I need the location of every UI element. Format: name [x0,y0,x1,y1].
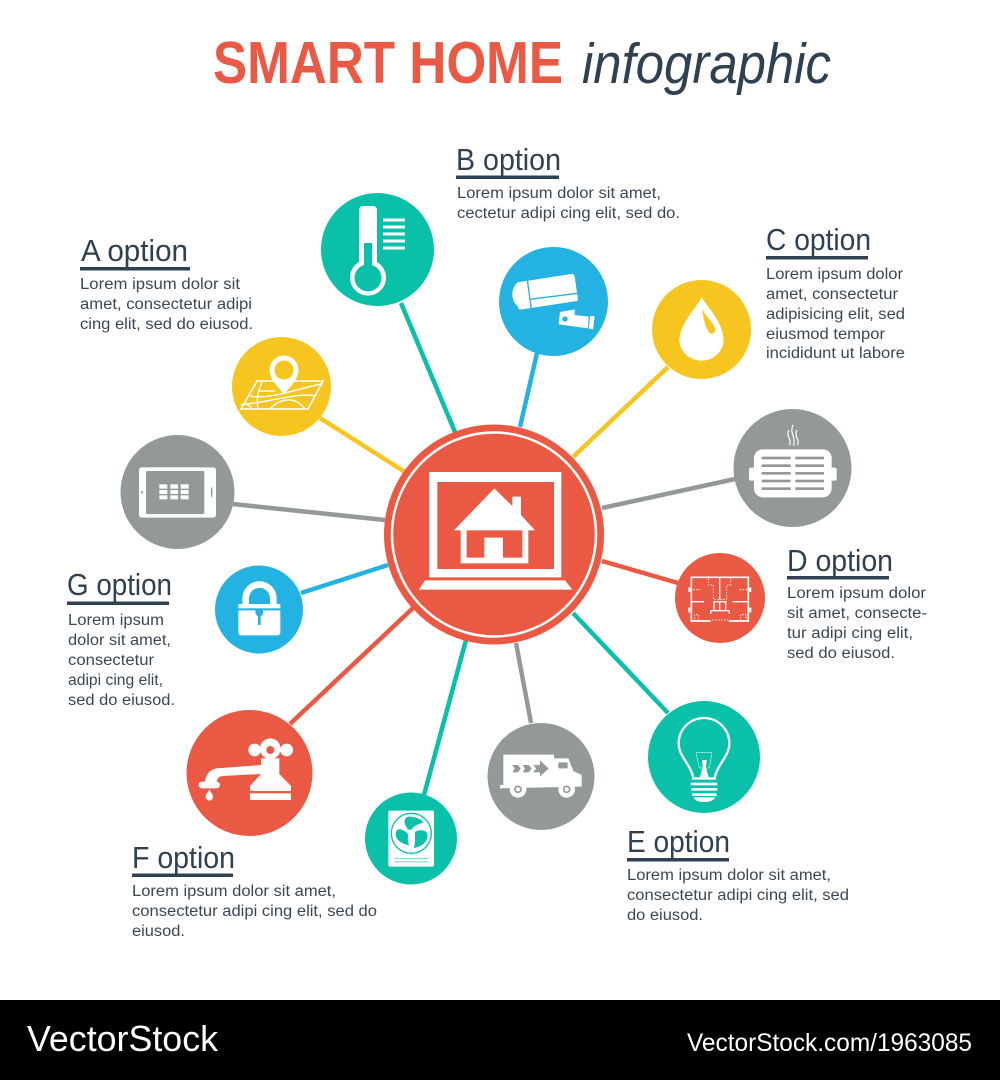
B option text: B option [456,142,561,177]
icon: faucet [186,710,312,836]
icon: delivery truck [488,723,594,830]
C option text: adipisicing elit, sed [766,306,905,323]
F option text [132,840,377,940]
A option text: Lorem ipsum dolor sit [80,276,241,293]
F option text: F option [132,840,235,875]
icon: thermometer [321,193,434,306]
C option text: C option [766,222,871,257]
title [213,30,831,96]
B option text: Lorem ipsum dolor sit amet, [457,185,661,202]
A option text: A option [81,233,188,268]
icon: floor plan [675,553,765,643]
icon: fan [365,792,457,884]
G option text: G option [67,567,172,602]
F option text: consectetur adipi cing elit, sed do [132,903,377,920]
F option text: eiusod. [132,923,185,940]
central hub: laptop with house [384,424,604,644]
footer bar: VectorStock [27,1018,219,1059]
icon: tablet [120,435,234,549]
G option text: Lorem ipsum [68,612,164,629]
E option text: E option [627,824,730,859]
F option text: Lorem ipsum dolor sit amet, [132,883,336,900]
icon: light bulb [648,701,760,813]
A option text [80,233,253,333]
D option text: D option [787,543,893,578]
C option text: eiusmod tempor [766,326,885,343]
E option text: Lorem ipsum dolor sit amet, [627,867,831,884]
icon: heater [734,409,852,527]
G option text: adipi cing elit, [68,672,163,689]
footer bar: VectorStock.com/1963085 [687,1029,972,1057]
D option text [787,543,927,662]
G option text: sed do eiusod. [68,692,175,709]
icon: padlock [215,566,303,654]
E option text [627,824,849,924]
D option text: sed do eiusod. [787,645,895,662]
E option text: do eiusod. [627,907,703,924]
D option text: sit amet, consecte- [787,605,927,622]
icon: security camera [499,247,608,356]
G option text: consectetur [68,652,154,669]
title: SMART HOME [213,30,563,96]
icon: water drop [652,280,751,379]
C option text: incididunt ut labore [766,345,905,362]
D option text: tur adipi cing elit, [787,625,913,642]
connector lines [233,303,735,795]
icon: map pin [232,337,331,436]
A option text: cing elit, sed do eiusod. [80,316,253,333]
C option text: amet, consectetur [766,286,898,303]
B option text: cectetur adipi cing elit, sed do. [457,205,680,222]
C option text [766,222,905,362]
G option text: dolor sit amet, [68,632,171,649]
title: infographic [582,32,831,96]
G option text [67,567,175,709]
footer bar [0,1000,1000,1080]
E option text: consectetur adipi cing elit, sed [627,887,849,904]
D option text: Lorem ipsum dolor [787,585,926,602]
B option text [456,142,680,222]
A option text: amet, consectetur adipi [80,296,252,313]
C option text: Lorem ipsum dolor [766,266,903,283]
